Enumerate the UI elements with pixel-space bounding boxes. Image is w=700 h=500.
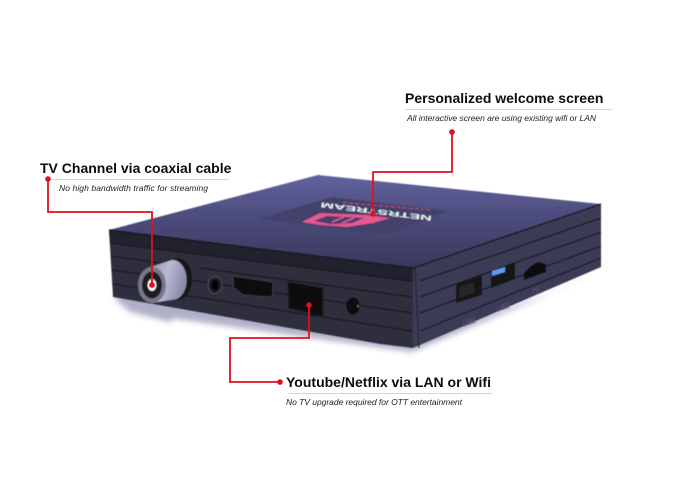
connector line <box>230 305 309 382</box>
right grooves <box>415 218 601 348</box>
audio jack <box>208 276 222 294</box>
port labels: TF <box>532 285 541 297</box>
TF slot <box>524 262 546 280</box>
port labels: USB2 <box>497 300 510 314</box>
box top face <box>109 175 601 268</box>
connector line <box>48 179 152 285</box>
port labels: USB1 <box>463 315 476 329</box>
logo mark <box>302 213 390 227</box>
box right face <box>413 204 601 348</box>
LAN port <box>288 282 323 316</box>
front grooves <box>110 243 412 331</box>
shadow <box>114 276 592 352</box>
front top band <box>109 230 413 281</box>
logo tagline <box>343 202 430 210</box>
heading: Personalized welcome screen <box>405 90 603 106</box>
callout: Youtube/Netflix <box>230 302 492 407</box>
top edge highlight <box>109 204 601 268</box>
logo text: NETRSTREAM <box>320 200 432 221</box>
connector line <box>373 132 452 214</box>
power jack <box>346 298 360 314</box>
subtext: All interactive screen are using existing wifi or LAN <box>406 113 597 123</box>
box front face <box>109 230 413 348</box>
heading: TV Channel via coaxial cable <box>40 160 232 176</box>
USB2 port <box>491 262 515 288</box>
logo panel <box>258 197 448 235</box>
set-top box photo <box>109 175 601 352</box>
USB1 port <box>456 275 482 303</box>
callout: TV channel <box>40 160 232 288</box>
port labels <box>463 285 541 329</box>
callout: personalized welcome screen <box>370 90 612 217</box>
subtext: No TV upgrade required for OTT entertainment <box>286 397 463 407</box>
HDMI port <box>233 276 273 297</box>
subtext: No high bandwidth traffic for streaming <box>59 183 208 193</box>
coaxial connector <box>138 258 192 303</box>
heading: Youtube/Netflix via LAN or Wifi <box>286 374 491 390</box>
